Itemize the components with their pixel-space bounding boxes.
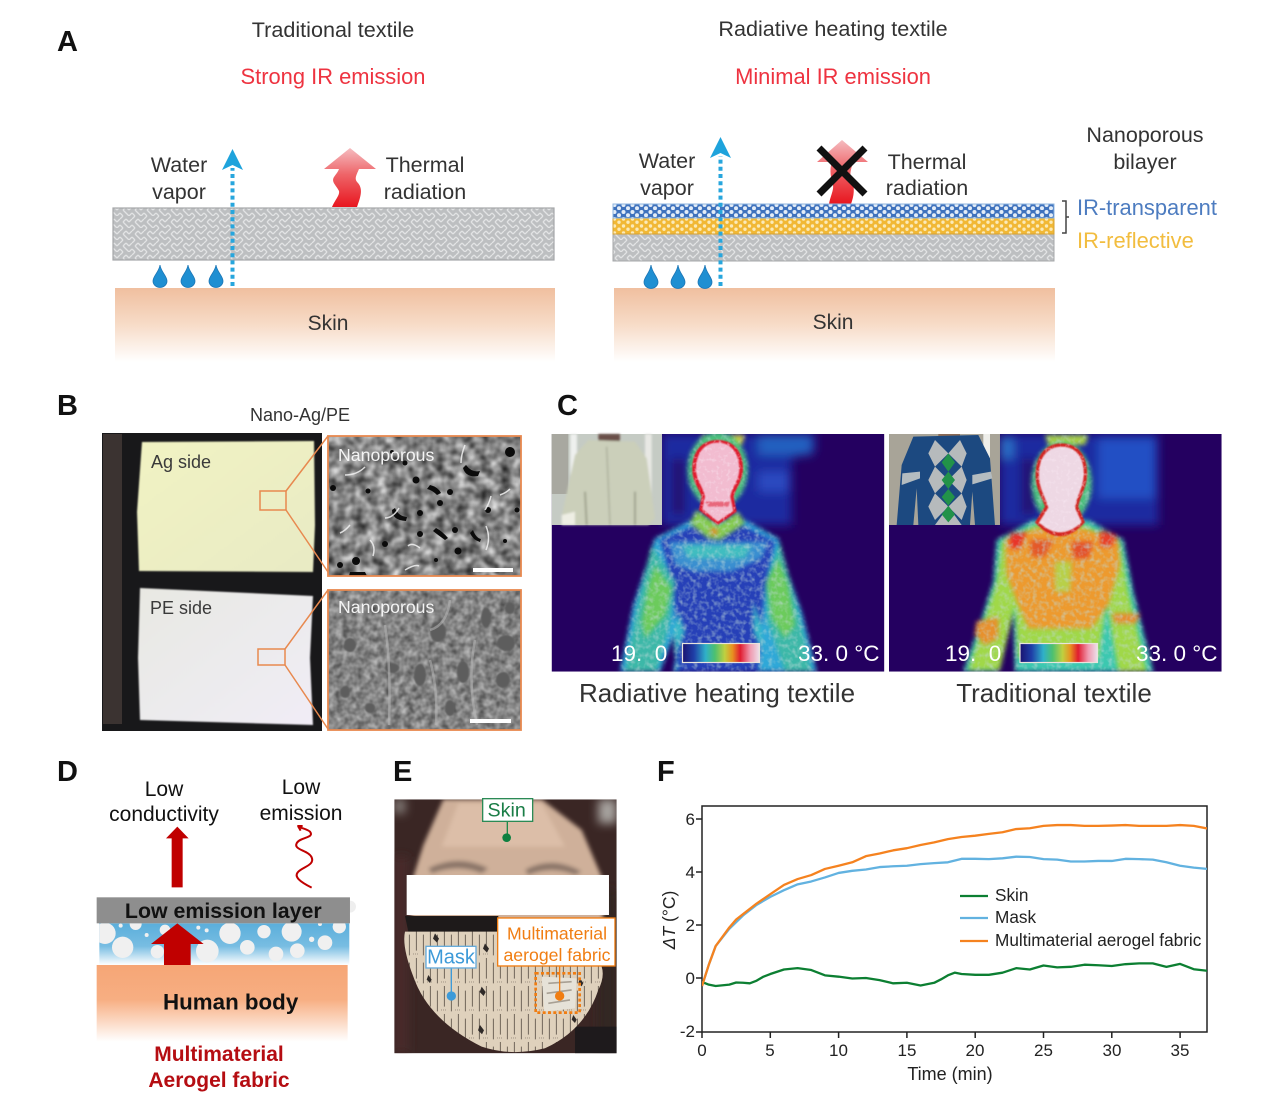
heading: radiative heating textile: Radiative heating textile: [718, 16, 948, 41]
y axis labels: 2: [686, 916, 695, 935]
icon: water drops: [644, 265, 712, 288]
label F: F: [657, 756, 675, 788]
x axis labels: [697, 1041, 1189, 1060]
label: low conductivity: conductivity: [109, 803, 219, 826]
scale bar: [470, 719, 511, 723]
label: water vapor: vapor: [640, 176, 694, 200]
label: multimaterial aerogel fabric: Aerogel fabric: [148, 1069, 290, 1092]
label: thermal radiation: Thermal: [386, 153, 464, 177]
inset photo: white shirt: [552, 434, 662, 525]
label: water vapor: Water: [639, 149, 695, 173]
nanoporous bilayer and fabric: [613, 204, 1054, 261]
label: PE side: PE side: [150, 598, 212, 618]
arrow: heat through layer: [151, 923, 204, 965]
panel: traditional textile: [113, 17, 555, 362]
arrow: thermal radiation: [324, 148, 376, 207]
x axis labels: 30: [1103, 1041, 1121, 1060]
x axis labels: 20: [966, 1041, 984, 1060]
y axis labels: 6: [686, 810, 695, 829]
human body layer: Human body: [163, 990, 299, 1015]
bracket: [1062, 201, 1069, 233]
x axis title: Time (min): [907, 1064, 993, 1084]
callout: zoom region lines: [258, 436, 328, 729]
legend: Skin: [995, 885, 1028, 905]
label: IR-transparent: IR-transparent: [1077, 195, 1217, 220]
color scale bar: [1020, 644, 1098, 662]
legend: [960, 885, 1202, 950]
panel B: Nano-Ag/PE photographs: [57, 390, 521, 731]
thermal image: traditional textile: [889, 434, 1222, 708]
label: 33.0 °C: 33. 0 °C: [1136, 641, 1218, 666]
arrow: blocked thermal radiation: [817, 140, 868, 204]
low emission layer: Low emission layer: [125, 899, 322, 923]
series: multimaterial aerogel fabric: [702, 825, 1207, 986]
label: nanoporous bilayer: bilayer: [1113, 150, 1177, 174]
marker: multimaterial aerogel fabric: Multimaterial: [507, 924, 607, 944]
label: thermal radiation: Thermal: [888, 150, 966, 174]
plot frame and ticks: [696, 806, 1207, 1038]
label: multimaterial aerogel fabric: Multimaterial: [154, 1043, 284, 1066]
y axis labels: -2: [680, 1022, 695, 1041]
icon: black cross: [819, 148, 865, 194]
arrow: water vapor: [710, 137, 731, 286]
x axis labels: 10: [829, 1041, 848, 1060]
heading: traditional textile: Traditional textile: [252, 17, 414, 42]
legend: Mask: [995, 907, 1036, 927]
label: thermal radiation: radiation: [384, 180, 466, 204]
x axis labels: 35: [1171, 1041, 1189, 1060]
y axis title: ΔT (°C): [659, 891, 679, 950]
y axis labels: 0: [686, 969, 695, 988]
scale bar: [473, 568, 513, 572]
photo of samples: [102, 433, 322, 731]
label: nanoporous bilayer: Nanoporous: [1086, 123, 1204, 147]
aerogel patch: [542, 977, 577, 1012]
photo: face with mask: [394, 799, 617, 1053]
label: water vapor: vapor: [152, 180, 206, 204]
label: 19.0: 19. 0: [611, 641, 667, 666]
panel: radiative heating textile: [613, 16, 1217, 362]
label: nanoporous: Nanoporous: [338, 445, 435, 465]
label A: A: [57, 26, 78, 58]
x axis labels: 0: [697, 1041, 707, 1060]
label: 33.0 °C: 33. 0 °C: [798, 641, 880, 666]
fabric layer: [113, 208, 554, 260]
line chart: [659, 806, 1207, 1084]
panel C: thermal images: [552, 390, 1222, 708]
series: mask: [702, 857, 1207, 986]
series curves: [702, 825, 1207, 986]
icon: water drops: [153, 265, 223, 288]
x axis labels: 5: [765, 1041, 775, 1060]
label E: E: [393, 756, 412, 788]
marker: skin: Skin: [488, 799, 526, 821]
x axis labels: 15: [898, 1041, 916, 1060]
x axis labels: 25: [1034, 1041, 1053, 1060]
skin layer: [614, 288, 1055, 362]
subheading: minimal IR emission: Minimal IR emission: [735, 64, 931, 89]
marker: mask: Mask: [427, 947, 476, 969]
marker: multimaterial aerogel fabric: [498, 918, 615, 1013]
subheading: strong IR emission: Strong IR emission: [241, 64, 425, 89]
thermal image: radiative heating textile: [552, 432, 884, 708]
skin layer: Skin: [813, 311, 853, 334]
label: Ag side: Ag side: [151, 452, 211, 472]
series: skin: [702, 963, 1207, 986]
label: nanoporous: Nanoporous: [338, 597, 435, 617]
label: low conductivity: Low: [145, 778, 184, 801]
caption: traditional textile: Traditional textile: [956, 678, 1152, 708]
aerogel layer with bubbles: [99, 923, 350, 964]
skin layer: [115, 288, 555, 362]
label: low emission: Low: [282, 776, 321, 799]
label: thermal radiation: radiation: [886, 176, 968, 200]
label C: C: [557, 390, 578, 422]
micrograph: Ag side: [328, 436, 521, 576]
heading: Nano-Ag/PE: Nano-Ag/PE: [250, 405, 350, 425]
panel E: mask photograph: [393, 756, 617, 1053]
panel D: multimaterial aerogel fabric schematic: [57, 756, 356, 1092]
marker: skin: [483, 799, 533, 842]
arrow: water vapor: [222, 149, 243, 286]
label D: D: [57, 756, 78, 788]
panel A: textile schematics: [57, 16, 1217, 362]
label: water vapor: Water: [151, 153, 207, 177]
label: 19.0: 19. 0: [945, 641, 1001, 666]
arrow: emission wave: [296, 826, 312, 888]
caption: radiative heating textile: Radiative heating textile: [579, 678, 855, 708]
micrograph: PE side: [328, 590, 521, 730]
arrow: conduction: [166, 827, 189, 887]
label: IR-reflective: IR-reflective: [1077, 228, 1194, 253]
human body layer: [97, 965, 348, 1042]
label: low emission: emission: [260, 802, 342, 825]
mask: [405, 916, 498, 932]
y axis labels: 4: [686, 863, 695, 882]
color scale bar: [682, 644, 760, 662]
legend: Multimaterial aerogel fabric: [995, 930, 1202, 950]
marker: multimaterial aerogel fabric: aerogel fabric: [503, 945, 611, 965]
y axis labels: [680, 810, 695, 1041]
panel F: temperature chart: [657, 756, 1207, 1084]
marker: mask: [426, 946, 476, 1001]
skin layer: Skin: [308, 312, 348, 335]
label B: B: [57, 390, 78, 422]
inset photo: argyle sweater: [889, 434, 1000, 525]
